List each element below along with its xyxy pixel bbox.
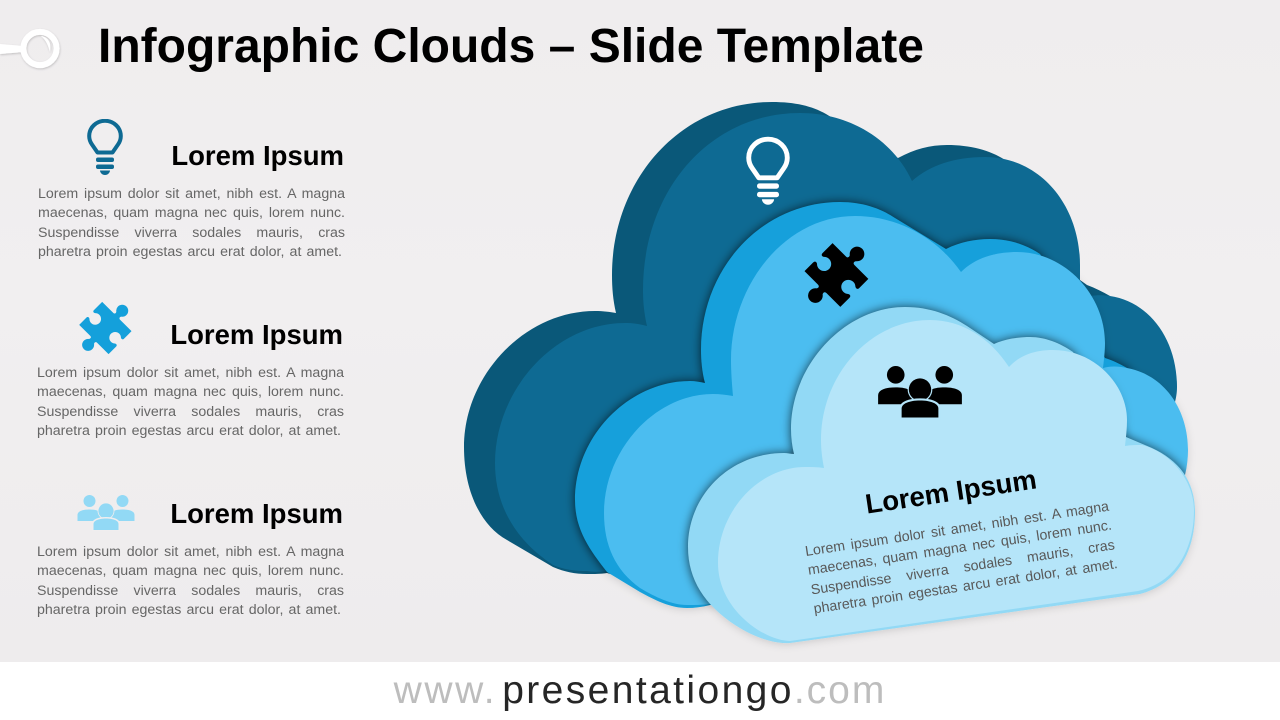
text block: cloud body: pharetra proin egestas arcu erat dolor, at amet. <box>812 556 1118 617</box>
icon: white light bulb <box>749 139 787 205</box>
panel: light blue cloud <box>688 307 1195 643</box>
text block: pharetra proin egestas arcu erat dolor, at amet. <box>38 244 342 260</box>
text block <box>37 365 344 439</box>
text block: cloud body: maecenas, quam magna nec quis, lorem nunc. <box>806 518 1112 579</box>
icon: people group <box>78 495 134 530</box>
heading: Lorem Ipsum <box>170 319 343 350</box>
icon: puzzle piece <box>79 302 132 354</box>
icon: logo ring <box>0 29 61 70</box>
panel: left item 3 <box>37 495 344 618</box>
heading: Lorem Ipsum <box>170 498 343 529</box>
text block <box>37 544 344 618</box>
heading: cloud title: Lorem Ipsum <box>863 463 1039 520</box>
text block: cloud body <box>804 499 1118 617</box>
text block <box>38 186 345 260</box>
panel: left item 2 <box>37 302 344 439</box>
text block: maecenas, quam magna nec quis, lorem nunc. <box>37 384 344 400</box>
text block: pharetra proin egestas arcu erat dolor, at amet. <box>37 423 341 439</box>
text block: Suspendisse viverra sodales mauris, cras <box>38 225 345 241</box>
footer: website url <box>0 662 1280 720</box>
text block: maecenas, quam magna nec quis, lorem nunc. <box>38 205 345 221</box>
text block: Suspendisse viverra sodales mauris, cras <box>37 404 344 420</box>
panel: medium blue cloud <box>575 202 1188 608</box>
text block: pharetra proin egestas arcu erat dolor, at amet. <box>37 602 341 618</box>
icon: black people group <box>878 366 962 417</box>
text block: Lorem ipsum dolor sit amet, nibh est. A magna <box>37 544 344 560</box>
text block: cloud body: Lorem ipsum dolor sit amet, nibh est. A magna <box>804 499 1110 560</box>
chart: layered clouds <box>464 102 1197 647</box>
text block: cloud body: Suspendisse viverra sodales mauris, cras <box>809 537 1115 598</box>
text block: Lorem ipsum dolor sit amet, nibh est. A magna <box>37 365 344 381</box>
title: Infographic Clouds – Slide Template <box>98 20 924 73</box>
text block: Suspendisse viverra sodales mauris, cras <box>37 583 344 599</box>
icon: light bulb <box>87 119 123 175</box>
text block: Lorem ipsum dolor sit amet, nibh est. A magna <box>38 186 345 202</box>
text block: maecenas, quam magna nec quis, lorem nunc. <box>37 563 344 579</box>
panel: dark blue cloud <box>464 102 1177 600</box>
footer: website url: www.presentationgo.com <box>394 669 886 712</box>
icon: black puzzle piece <box>793 231 880 319</box>
panel: left item 1 <box>38 119 345 260</box>
heading: Lorem Ipsum <box>171 140 344 171</box>
